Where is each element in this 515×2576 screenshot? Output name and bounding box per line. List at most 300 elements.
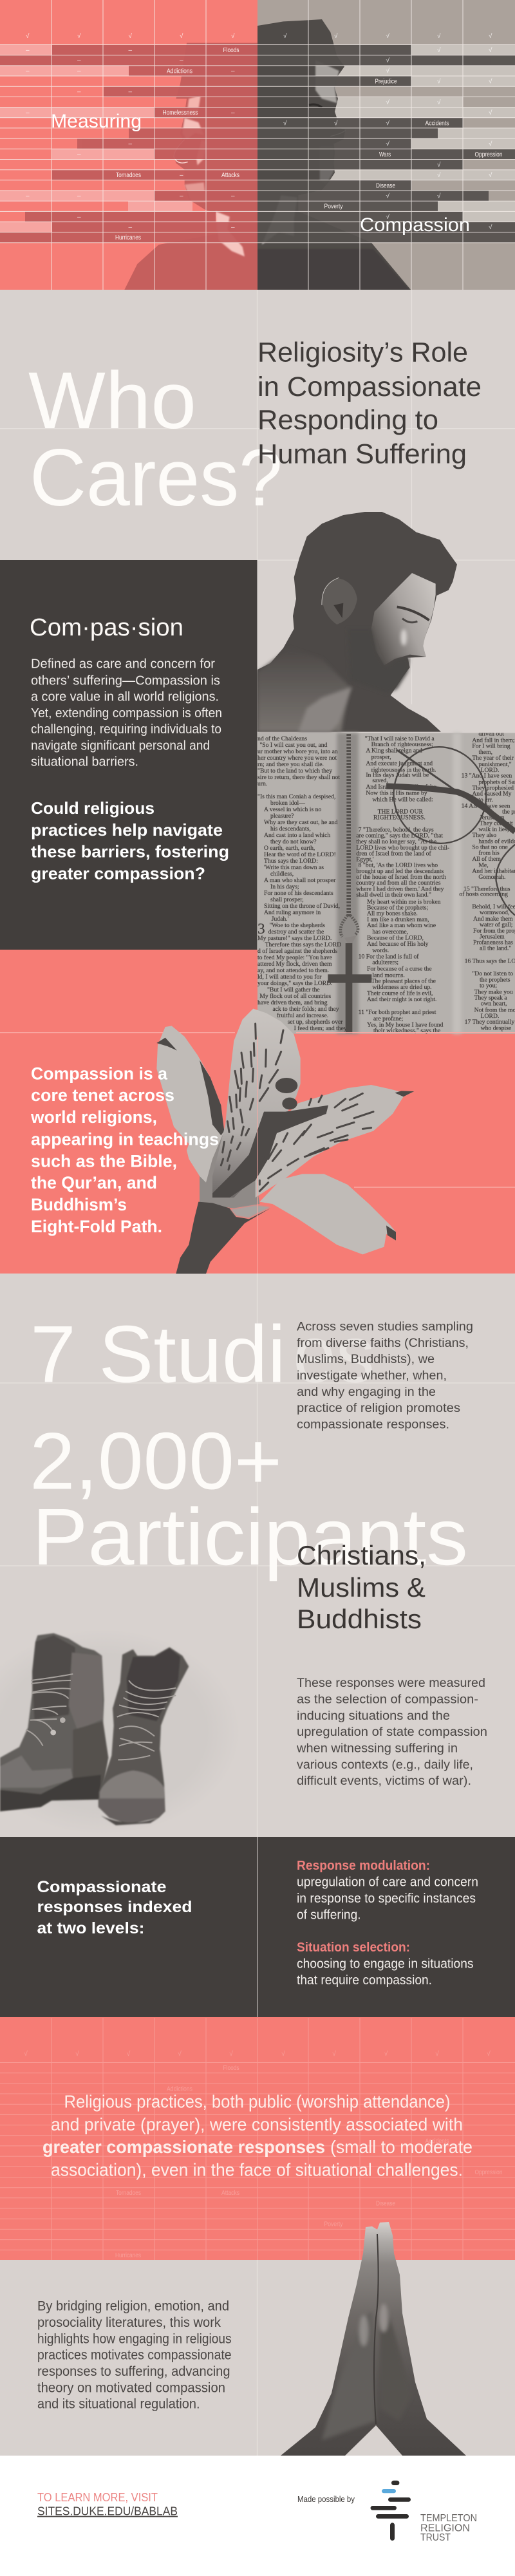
table ticks and dashes: √√	[386, 99, 441, 106]
book page text: wormwood,	[480, 909, 509, 916]
right boot	[98, 1647, 189, 1825]
book page text: driven out	[478, 730, 504, 737]
left boot	[0, 1633, 108, 1811]
book page text: has overcome,	[372, 928, 408, 935]
book page text: of the house of Israel from the north	[356, 874, 446, 881]
table ticks and dashes: –––	[26, 68, 235, 75]
book page text: of hosts concerning	[459, 891, 508, 898]
book page text: Egypt,'	[356, 856, 374, 863]
book pages	[258, 733, 515, 1034]
book page text: For I will bring	[472, 743, 510, 750]
table labels: suffering contexts: Addictions	[167, 67, 192, 75]
table ticks and dashes: ––	[26, 109, 235, 117]
panel background	[0, 2017, 515, 2260]
faded table pattern: √	[24, 2050, 28, 2058]
faded table pattern: √	[75, 2050, 79, 2058]
book page text: ay, and not attended to them.	[258, 967, 329, 974]
grid lines: studies section	[0, 1383, 515, 1566]
table ticks and dashes: –	[77, 151, 81, 158]
book page text: The pleasant places of the	[371, 978, 436, 985]
icon: rosary chain and cross	[328, 734, 371, 1033]
flower text: Eight-Fold Path.	[31, 1217, 162, 1236]
learn more link: SITES.DUKE.EDU/BABLAB	[37, 2505, 178, 2518]
book page text: The year of their	[472, 755, 514, 762]
flower text: world religions,	[30, 1107, 157, 1127]
book page text: all the land."	[480, 945, 511, 952]
heading: Christians, Muslims & Buddhists: Christians,	[297, 1540, 426, 1570]
book page text: "So I will cast you out, and	[259, 742, 328, 749]
table labels: suffering contexts: Oppression	[475, 151, 503, 158]
image: bearded man portrait	[258, 512, 457, 732]
faded table pattern: Hurricanes	[115, 2252, 141, 2259]
learn more link: TO LEARN MORE, VISIT	[37, 2491, 158, 2504]
lily stem	[176, 1202, 270, 1274]
learn more link	[37, 2491, 178, 2518]
table ticks and dashes: ––	[77, 57, 183, 64]
definition text: navigate significant personal and	[31, 738, 210, 753]
book gutter shading	[337, 733, 462, 1034]
research question: greater compassion?	[31, 863, 205, 883]
book page text: RIGHTEOUSNESS.	[373, 814, 426, 821]
table ticks and dashes: √√√	[283, 120, 390, 127]
book page text: So that no one	[472, 843, 508, 851]
studies description: investigate whether, when,	[297, 1369, 447, 1383]
panel: compassion definition	[0, 560, 258, 950]
heading: Christians, Muslims & Buddhists: Muslims &	[297, 1572, 426, 1603]
faded table pattern: √	[178, 2050, 182, 2058]
faded table pattern: √	[332, 2050, 336, 2058]
heading: Compassionate	[37, 1878, 167, 1896]
finding text: and private (prayer), were consistently associated with	[51, 2114, 463, 2134]
book page text: All of them	[472, 856, 501, 863]
table labels: suffering contexts: Attacks	[221, 171, 239, 179]
response modulation: Response modulation:	[297, 1859, 430, 1873]
faded table pattern: √	[281, 2050, 285, 2058]
measures description: difficult events, victims of war).	[297, 1774, 471, 1788]
title: Who Cares?: Who	[28, 356, 196, 446]
book page text: are coming," says the LORD, "that	[356, 832, 443, 840]
definition text: situational barriers.	[31, 755, 138, 769]
situation selection: that require compassion.	[297, 1973, 432, 1988]
book page text: Thus says the LORD:	[264, 858, 318, 865]
table labels: suffering contexts: Poverty	[324, 202, 343, 210]
book page text: 'Write this man down as	[264, 864, 324, 871]
book page text: which He will be called:	[372, 796, 433, 803]
book page text: 13 "And I have seen	[462, 773, 512, 780]
studies description: Across seven studies sampling	[297, 1321, 473, 1334]
table ticks and dashes: ––	[77, 89, 133, 95]
lily middle petal	[212, 1009, 301, 1198]
subtitle	[258, 337, 482, 469]
book page text: Hear the word of the LORD!	[264, 851, 336, 858]
book page text: land mourns.	[372, 972, 405, 979]
portrait: right half face	[258, 19, 411, 290]
conclusion text: practices motivates compassionate	[37, 2348, 232, 2363]
panel: hero split portrait	[0, 0, 515, 290]
book page text: "Do not listen to	[472, 970, 513, 977]
title: Who Cares?	[28, 356, 283, 523]
faded table pattern: Oppression	[475, 2168, 503, 2176]
book page text: where I had driven them.' And they	[356, 885, 444, 892]
icon: reading glasses	[385, 738, 515, 916]
book page text: punishment,"	[478, 761, 512, 768]
book page text: They also	[472, 832, 496, 839]
book page text: adulterers;	[372, 959, 398, 966]
flower text	[30, 1064, 219, 1236]
book page text: to you;	[480, 982, 497, 989]
table ticks and dashes: √	[489, 109, 492, 117]
table grid lines	[0, 0, 515, 290]
table ticks and dashes: √	[386, 67, 390, 75]
book page text: Jerusalem	[480, 933, 505, 940]
research question: these barriers, fostering	[31, 842, 229, 861]
definition text: challenging, requiring individuals to	[31, 722, 221, 737]
book page text: their wickedness," says the	[373, 1027, 440, 1034]
made possible by: Made possible by	[297, 2495, 355, 2504]
faded table pattern: Addictions	[167, 2085, 192, 2092]
book page text: walk in lies;	[478, 826, 509, 833]
finding text	[42, 2092, 473, 2179]
panel: red flower background	[0, 950, 515, 1274]
faded table pattern: √	[487, 2050, 491, 2058]
book page text: My pasture!" says the LORD.	[258, 935, 332, 942]
logo: Templeton Religion Trust: TEMPLETON	[420, 2513, 477, 2524]
flower text: such as the Bible,	[31, 1151, 177, 1170]
measures description: inducing situations and the	[297, 1709, 450, 1723]
book page text: 15 "Therefore thus	[464, 885, 510, 892]
table labels: suffering contexts: Tornadoes	[116, 171, 141, 179]
book page text: And fall in them;	[472, 737, 515, 744]
measures description: as the selection of compassion-	[297, 1693, 478, 1707]
book page text: And ruling anymore in	[264, 909, 321, 916]
grid line: flower section	[0, 1033, 515, 1187]
faded table pattern: Disease	[376, 2199, 395, 2207]
table ticks and dashes: √	[386, 57, 390, 64]
table ticks and dashes: –	[180, 172, 183, 179]
book page text: For none of his descendants	[264, 890, 333, 897]
definition text: Defined as care and concern for	[31, 657, 215, 672]
table ticks and dashes: ––	[26, 47, 133, 54]
panel background	[0, 560, 258, 950]
book page text: They speak a	[474, 994, 507, 1001]
book page text: words.	[372, 947, 389, 954]
book page text: from his	[478, 850, 500, 857]
book page text: nd of the Chaldeans	[258, 735, 307, 742]
book page text: attered My flock, driven them	[258, 961, 332, 968]
image: worn combat boots	[0, 1629, 240, 1835]
book page text: her country where you were not	[258, 755, 337, 762]
book page text: dren of Israel from the land of	[356, 850, 431, 857]
book page text: Why are they cast out, he and	[264, 819, 338, 826]
studies description: compassionate responses.	[297, 1418, 449, 1432]
book page text: are profane;	[373, 1015, 403, 1022]
book page text: your doings," says the LORD.	[258, 980, 333, 987]
table ticks and dashes: √√	[437, 171, 492, 179]
book page text: And because of His holy	[367, 941, 429, 948]
table ticks and dashes: √	[437, 161, 441, 169]
table ticks and dashes: √√	[386, 140, 492, 148]
book page text: righteousness in the earth.	[371, 766, 436, 773]
panel: footer	[0, 2456, 515, 2576]
finding text: greater compassionate responses	[42, 2137, 325, 2157]
definition text: others’ suffering—Compassion is	[31, 673, 220, 688]
book page text: who despise	[481, 1024, 511, 1031]
book page text: rn; and there you shall die.	[258, 761, 324, 768]
research question: practices help navigate	[31, 820, 223, 840]
book page text: And like a man whom wine	[367, 922, 436, 929]
book page text: set up, shepherds over	[288, 1019, 343, 1026]
vertical grid line over flower panel	[256, 1037, 258, 1274]
response modulation: upregulation of care and concern	[297, 1876, 478, 1890]
book page text: For because of a curse the	[367, 966, 432, 973]
measures description	[296, 1677, 487, 1788]
subtitle: Responding to	[258, 405, 438, 436]
hero label: Compassion: Compassion	[360, 214, 470, 236]
situation selection: choosing to engage in situations	[297, 1957, 474, 1971]
book page text: have driven them, and bring	[258, 999, 328, 1006]
book page text: LORD.	[481, 767, 499, 774]
book page text: 17 They continually	[465, 1019, 514, 1026]
book page text: Now this is His name by	[366, 789, 427, 796]
book page text: broken idol—	[270, 800, 305, 807]
portrait: left half face	[124, 43, 258, 290]
book page text: shall dwell in their own land."	[356, 891, 431, 898]
book page text: O earth, earth, earth,	[264, 845, 315, 852]
table ticks and dashes: ––––	[26, 193, 235, 200]
measures description: upregulation of state compassion	[297, 1725, 487, 1739]
book page text: ur mother who bore you, into an	[258, 748, 338, 755]
book page text: My heart within me is broken	[367, 898, 441, 905]
book page text: In his days;	[270, 883, 299, 890]
faded table pattern: Accidents	[425, 2138, 449, 2145]
book page text: And Israel will dwell safely;	[366, 784, 436, 791]
subtitle: Human Suffering	[258, 438, 467, 469]
table labels: suffering contexts	[115, 46, 503, 241]
big stat: 2,000+ Participants	[30, 1417, 468, 1582]
book page text: 14 Also I have seen	[462, 802, 510, 809]
lily left petal shadow	[156, 1038, 224, 1135]
book page text: Jerusalem	[480, 814, 505, 821]
book page text: Judah.'	[272, 916, 289, 923]
book page text: "But to the land to which they	[258, 767, 332, 775]
studies description: Muslims, Buddhists), we	[297, 1353, 435, 1366]
big stat: 7 Studies: 7 Studi	[30, 1310, 286, 1400]
table labels: suffering contexts: Disease	[376, 182, 395, 189]
studies description	[297, 1321, 473, 1432]
big stat: 2,000+ Participants: 2,000+	[30, 1417, 282, 1507]
image: praying hands	[281, 2222, 466, 2456]
book page text: My flock out of all countries	[259, 993, 331, 1000]
book page text: A vessel in which is no	[264, 806, 321, 813]
table ticks and dashes	[26, 32, 492, 231]
faded table pattern: √	[229, 2050, 233, 2058]
conclusion text: responses to suffering, advancing	[37, 2364, 230, 2379]
image: open Bible with glasses and rosary	[258, 730, 515, 1034]
book page text: saved,	[372, 777, 388, 784]
conclusion text: highlights how engaging in religious	[37, 2331, 232, 2346]
table ticks and dashes: √√	[437, 77, 492, 85]
conclusion text	[37, 2299, 232, 2412]
hero right grey background	[258, 0, 515, 290]
measures description: when witnessing suffering in	[296, 1742, 458, 1756]
book page text: own heart,	[481, 1001, 507, 1008]
book page text: they shall no longer say, "As the	[356, 838, 436, 845]
heading: at two levels:	[37, 1919, 144, 1937]
definition text	[31, 657, 222, 769]
table ticks and dashes: √√	[386, 192, 441, 200]
book page text: LORD.	[481, 1013, 499, 1020]
table labels: suffering contexts: Wars	[379, 151, 391, 158]
book page text: And cast into a land which	[264, 832, 330, 839]
lily left petal	[156, 1026, 224, 1183]
book page text: And make them	[473, 916, 513, 923]
book page text: 10 For the land is full of	[359, 953, 419, 960]
finding text: (small to moderate	[330, 2137, 473, 2157]
table ticks and dashes: √	[489, 223, 492, 231]
book page text: to feed My people: "You have	[258, 954, 332, 961]
book page text: his descendants,	[270, 825, 311, 832]
table ticks and dashes: √	[386, 213, 390, 221]
table labels: suffering contexts: Prejudice	[375, 77, 397, 85]
logo: Templeton Religion Trust	[371, 2481, 477, 2543]
conclusion text: theory on motivated compassion	[37, 2381, 225, 2396]
lily right petal	[256, 1085, 414, 1198]
table labels: suffering contexts: Hurricanes	[115, 234, 141, 241]
book page text: "That I will raise to David a	[365, 735, 435, 742]
book page text: destroy and scatter the	[268, 928, 324, 935]
lily speckles	[221, 1024, 373, 1191]
faded table pattern: Tornadoes	[116, 2189, 141, 2197]
book page text: In His days Judah will be	[366, 772, 429, 779]
dark table bars	[0, 45, 515, 243]
book page text: wilderness are dried up.	[372, 984, 432, 991]
book page text: A King shall reign and	[366, 747, 422, 754]
book page text: Sitting on the throne of David,	[264, 903, 340, 910]
book page text: urn.	[258, 780, 267, 787]
heading: Christians, Muslims & Buddhists	[297, 1540, 426, 1634]
panel background	[0, 1837, 515, 2017]
response modulation: in response to specific instances	[297, 1892, 476, 1906]
panel: key finding	[0, 2017, 515, 2260]
flower text: appearing in teachings	[31, 1129, 219, 1149]
book page text: And caused My	[472, 791, 512, 798]
book page text: they do not know?	[270, 838, 317, 845]
faded table pattern: Poverty	[324, 2220, 343, 2228]
book page text: THE LORD OUR	[378, 808, 423, 815]
hero label: Measuring: Measuring	[51, 111, 142, 132]
book page text: They prophesied	[472, 785, 514, 792]
logo: Templeton Religion Trust: TRUST	[420, 2532, 451, 2543]
book page text: And execute judgment and	[366, 760, 433, 767]
book page text: 8 "but, 'As the LORD lives who	[359, 862, 438, 869]
heading	[37, 1878, 192, 1937]
definition text: Yet, extending compassion is often	[31, 706, 222, 720]
book page text: shall prosper,	[270, 896, 304, 903]
book page text: "Woe to the shepherds	[269, 922, 325, 929]
book page text: the prophets	[480, 976, 510, 983]
book page text: Gomorrah.	[478, 874, 505, 881]
heading: Christians, Muslims & Buddhists: Buddhists	[297, 1604, 422, 1634]
book page text: Because of the LORD,	[367, 934, 424, 941]
divider	[256, 1837, 258, 2017]
faded table pattern: √	[384, 2050, 388, 2058]
book page text: Yes, in My house I have found	[367, 1021, 444, 1028]
table labels: suffering contexts: Accidents	[425, 120, 449, 127]
table labels: suffering contexts: Homelessness	[162, 109, 198, 117]
book page text: LORD lives who brought up the chil-	[356, 844, 449, 851]
lily dark throat	[212, 1105, 328, 1198]
book page text: country and from all the countries	[356, 879, 441, 887]
heading: responses indexed	[37, 1898, 192, 1916]
response modulation: of suffering.	[297, 1908, 360, 1923]
studies description: and why engaging in the	[297, 1386, 436, 1399]
faded table pattern	[0, 2018, 515, 2260]
conclusion text: By bridging religion, emotion, and	[37, 2299, 229, 2313]
book page text: water of gall;	[480, 921, 512, 928]
book page text: And their might is not right.	[367, 996, 436, 1003]
book page text: 7 "Therefore, behold, the days	[359, 827, 434, 834]
book page text: ld, I will attend to you for	[258, 973, 322, 981]
faded table pattern: Floods	[223, 2064, 239, 2072]
book page text: brought up and led the descendants	[356, 868, 444, 875]
title: Who Cares?: Cares?	[30, 433, 283, 523]
book page text: "But I will gather the	[267, 986, 320, 993]
book page text: I am like a drunken man,	[367, 916, 429, 923]
studies description: practice of religion promotes	[297, 1402, 460, 1415]
table ticks and dashes: √√√√√√√√√√	[26, 32, 492, 40]
book page text: them,	[478, 749, 492, 756]
book page text: d of Israel against the shepherds	[258, 948, 337, 955]
definition text: a core value in all world religions.	[31, 690, 219, 704]
boots soft background glow	[0, 1629, 240, 1835]
measures description: various contexts (e.g., daily life,	[297, 1758, 473, 1772]
lily base filling between petals	[187, 1125, 259, 1208]
measures description: These responses were measured	[297, 1677, 485, 1690]
book page text: 3	[258, 921, 265, 937]
research question	[31, 798, 229, 883]
situation selection: Situation selection:	[297, 1941, 410, 1955]
footer background	[0, 2456, 515, 2576]
table ticks and dashes: –	[77, 214, 81, 221]
book page text	[258, 730, 515, 1034]
book page text: 11 "For both prophet and priest	[359, 1009, 436, 1016]
studies description: from diverse faiths (Christians,	[297, 1337, 469, 1350]
flower text: core tenet across	[31, 1086, 174, 1105]
book page text: prosper,	[371, 753, 391, 760]
book page text: Therefore thus says the LORD	[265, 941, 341, 948]
finding text: Religious practices, both public (worship attendance)	[64, 2092, 451, 2112]
book page text: Branch of righteousness;	[371, 741, 433, 748]
flower text: the Qur’an, and	[31, 1173, 157, 1192]
book page text: "Is this man Coniah a despised,	[258, 793, 335, 800]
book page text: childless,	[270, 870, 294, 878]
book page text: to err.	[478, 796, 493, 804]
lily lower petal	[259, 1174, 396, 1254]
book page text: All my bones shake.	[367, 910, 418, 917]
situation selection	[297, 1941, 474, 1988]
book page text: fruitful and increase.	[277, 1012, 328, 1019]
big stat: 2,000+ Participants: Participants	[32, 1492, 468, 1582]
book page text: pleasure?	[270, 813, 294, 820]
heading: Com·pas·sion: Com·pas·sion	[30, 614, 183, 641]
big stat: 7 Studies: es	[293, 1310, 375, 1400]
book page text: ack to their folds; and they	[272, 1006, 339, 1013]
book page text: A man who shall not prosper	[264, 877, 336, 884]
faded table pattern: √	[127, 2050, 131, 2058]
book page text: They make you	[474, 988, 513, 995]
book page text: I feed them; and they	[294, 1025, 347, 1032]
light table bars	[0, 45, 515, 232]
